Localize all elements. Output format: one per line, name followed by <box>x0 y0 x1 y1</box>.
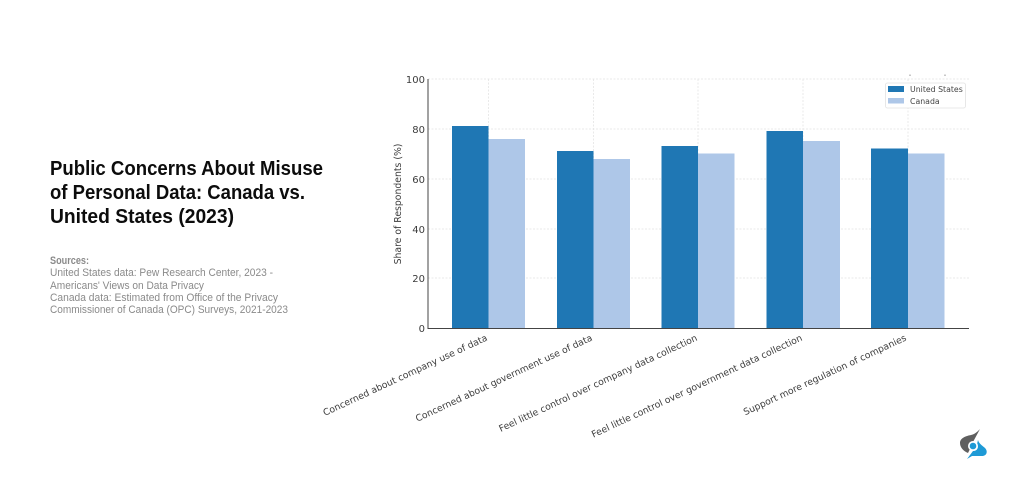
x axis category labels: Feel little control over company data collection <box>497 333 699 435</box>
sources text block: Canada data: Estimated from Office of the Privacy <box>50 292 278 304</box>
y axis tick labels: 40 <box>412 225 425 236</box>
y axis tick labels: 0 <box>419 324 425 335</box>
icon: logo <box>960 429 987 459</box>
title: United States (2023) <box>50 206 234 228</box>
x axis category labels <box>322 333 908 440</box>
sources text block: United States data: Pew Research Center, 2023 - <box>50 267 273 279</box>
x axis category labels: Concerned about company use of data <box>322 333 489 419</box>
y axis tick labels: 80 <box>412 125 425 136</box>
legend: Canada <box>910 97 940 106</box>
sources text block: Americans' Views on Data Privacy <box>50 280 204 292</box>
y axis tick labels <box>406 75 425 335</box>
title: of Personal Data: Canada vs. <box>50 182 305 204</box>
sources text block: Commissioner of Canada (OPC) Surveys, 2021-2023 <box>50 304 288 316</box>
sources text block: Sources: <box>50 255 89 267</box>
y axis tick labels: 100 <box>406 75 425 86</box>
bars: Canada <box>488 139 944 328</box>
title <box>50 158 323 228</box>
x axis category labels: Concerned about government use of data <box>414 333 594 425</box>
y axis title: Share of Respondents (%) <box>393 144 404 264</box>
legend <box>886 83 966 108</box>
legend: United States <box>910 85 963 94</box>
sources text block <box>50 255 288 316</box>
legend top marks <box>910 74 945 76</box>
title: Public Concerns About Misuse <box>50 158 323 180</box>
bar chart <box>322 74 969 440</box>
x axis category labels: Support more regulation of companies <box>742 333 908 418</box>
x axis category labels: Feel little control over government data collection <box>590 333 804 440</box>
bars: United States <box>452 126 908 328</box>
y axis tick labels: 20 <box>412 274 425 285</box>
axes <box>428 79 969 328</box>
y axis tick labels: 60 <box>412 175 425 186</box>
